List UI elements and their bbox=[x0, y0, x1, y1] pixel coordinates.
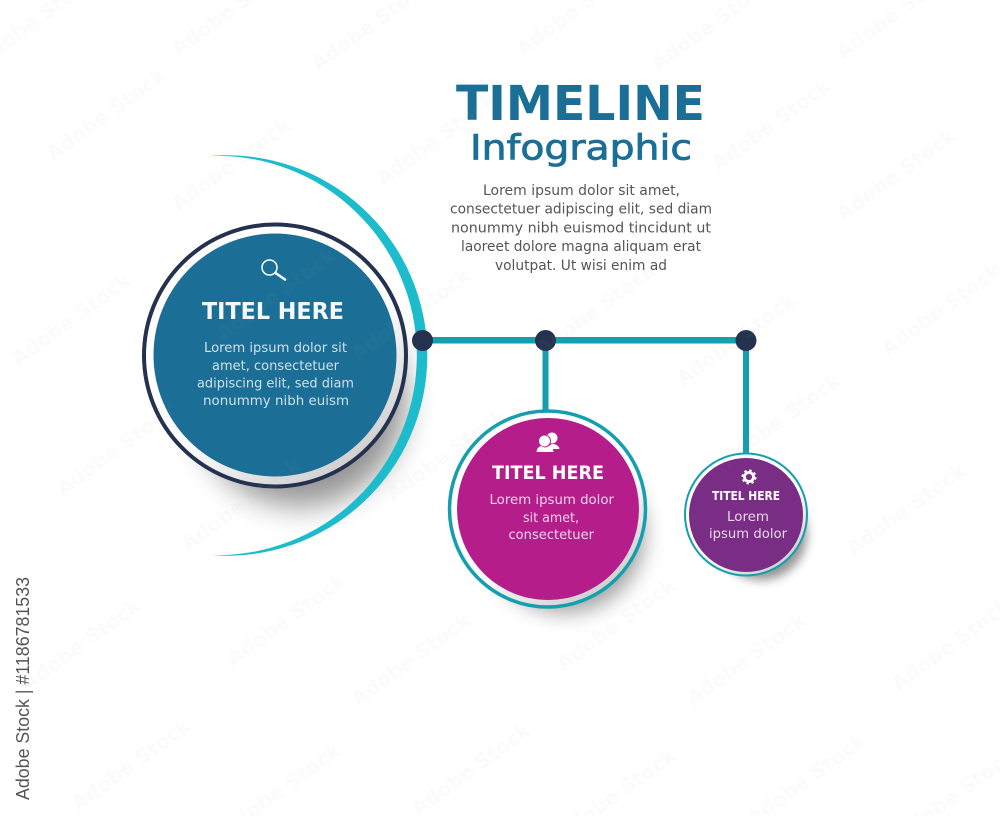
panel: large blue circle bbox=[144, 224, 406, 486]
watermark: Adobe Stock bbox=[347, 608, 476, 711]
watermark: Adobe Stock bbox=[222, 568, 351, 671]
watermark: Adobe Stock bbox=[177, 453, 306, 556]
watermark: Adobe Stock bbox=[372, 88, 501, 191]
crescent arc bbox=[210, 155, 427, 556]
watermark: Adobe Stock bbox=[532, 258, 661, 361]
watermark: Adobe Stock bbox=[7, 268, 136, 371]
watermark: Adobe Stock bbox=[17, 593, 146, 696]
stock credit: Adobe Stock | #1186781533 bbox=[13, 577, 33, 800]
watermark: Adobe Stock bbox=[832, 123, 961, 226]
icon: magnifier bbox=[262, 260, 285, 280]
panel: purple circle bbox=[685, 454, 807, 576]
text block: pink circle body: Lorem ipsum dolor bbox=[490, 492, 614, 508]
text block: large circle body: nonummy nibh euism bbox=[203, 393, 349, 409]
icon: users bbox=[536, 432, 560, 452]
watermark: Adobe Stock bbox=[42, 63, 171, 166]
shadow: purple circle bbox=[715, 488, 807, 580]
text block: intro: consectetuer adipiscing elit, sed diam bbox=[450, 202, 712, 218]
text block: intro: volutpat. Ut wisi enim ad bbox=[495, 258, 667, 274]
watermark: Adobe Stock bbox=[382, 403, 511, 506]
text block: large circle body: Lorem ipsum dolor sit bbox=[204, 340, 347, 356]
watermark: Adobe Stock bbox=[347, 263, 476, 366]
watermark: Adobe Stock bbox=[672, 288, 801, 391]
text block: intro: laoreet dolore magna aliquam erat bbox=[461, 239, 702, 255]
shadow: large circle bbox=[194, 294, 406, 506]
heading: purple circle title: TITEL HERE bbox=[712, 488, 780, 503]
watermark: Adobe Stock bbox=[67, 713, 196, 816]
heading: large circle title: TITEL HERE bbox=[202, 299, 344, 325]
text block: pink circle body bbox=[490, 492, 614, 543]
watermark: Adobe Stock bbox=[717, 368, 846, 471]
text block: pink circle body: sit amet, bbox=[523, 510, 579, 526]
watermark: Adobe Stock bbox=[707, 73, 836, 176]
text block: purple circle body bbox=[709, 509, 787, 542]
panel: pink circle bbox=[450, 411, 646, 607]
shadow: pink circle bbox=[485, 453, 645, 613]
text block: intro: nonummy nibh euismod tincidunt ut bbox=[451, 220, 712, 236]
title: TIMELINE bbox=[456, 76, 705, 132]
watermark: Adobe Stock bbox=[842, 458, 971, 561]
text block: pink circle body: consectetuer bbox=[508, 527, 594, 543]
heading: pink circle title: TITEL HERE bbox=[492, 462, 604, 484]
watermark: Adobe Stock bbox=[52, 398, 181, 501]
subtitle: Infographic bbox=[470, 128, 692, 168]
text block: large circle body bbox=[197, 340, 354, 409]
text block: intro: Lorem ipsum dolor sit amet, bbox=[483, 183, 680, 199]
watermark: Adobe Stock bbox=[212, 243, 341, 346]
text block: large circle body: adipiscing elit, sed diam bbox=[197, 376, 354, 392]
watermark: Adobe Stock bbox=[167, 113, 296, 216]
icon: gear bbox=[742, 470, 756, 484]
timeline nodes bbox=[412, 330, 756, 351]
text block: intro bbox=[450, 183, 712, 274]
connector lines bbox=[422, 337, 749, 456]
text block: large circle body: amet, consectetuer bbox=[212, 358, 339, 374]
watermark: Adobe Stock bbox=[552, 573, 681, 676]
text block: purple circle body: Lorem bbox=[727, 509, 769, 525]
text block: purple circle body: ipsum dolor bbox=[709, 526, 787, 542]
watermark: Adobe Stock bbox=[682, 608, 811, 711]
